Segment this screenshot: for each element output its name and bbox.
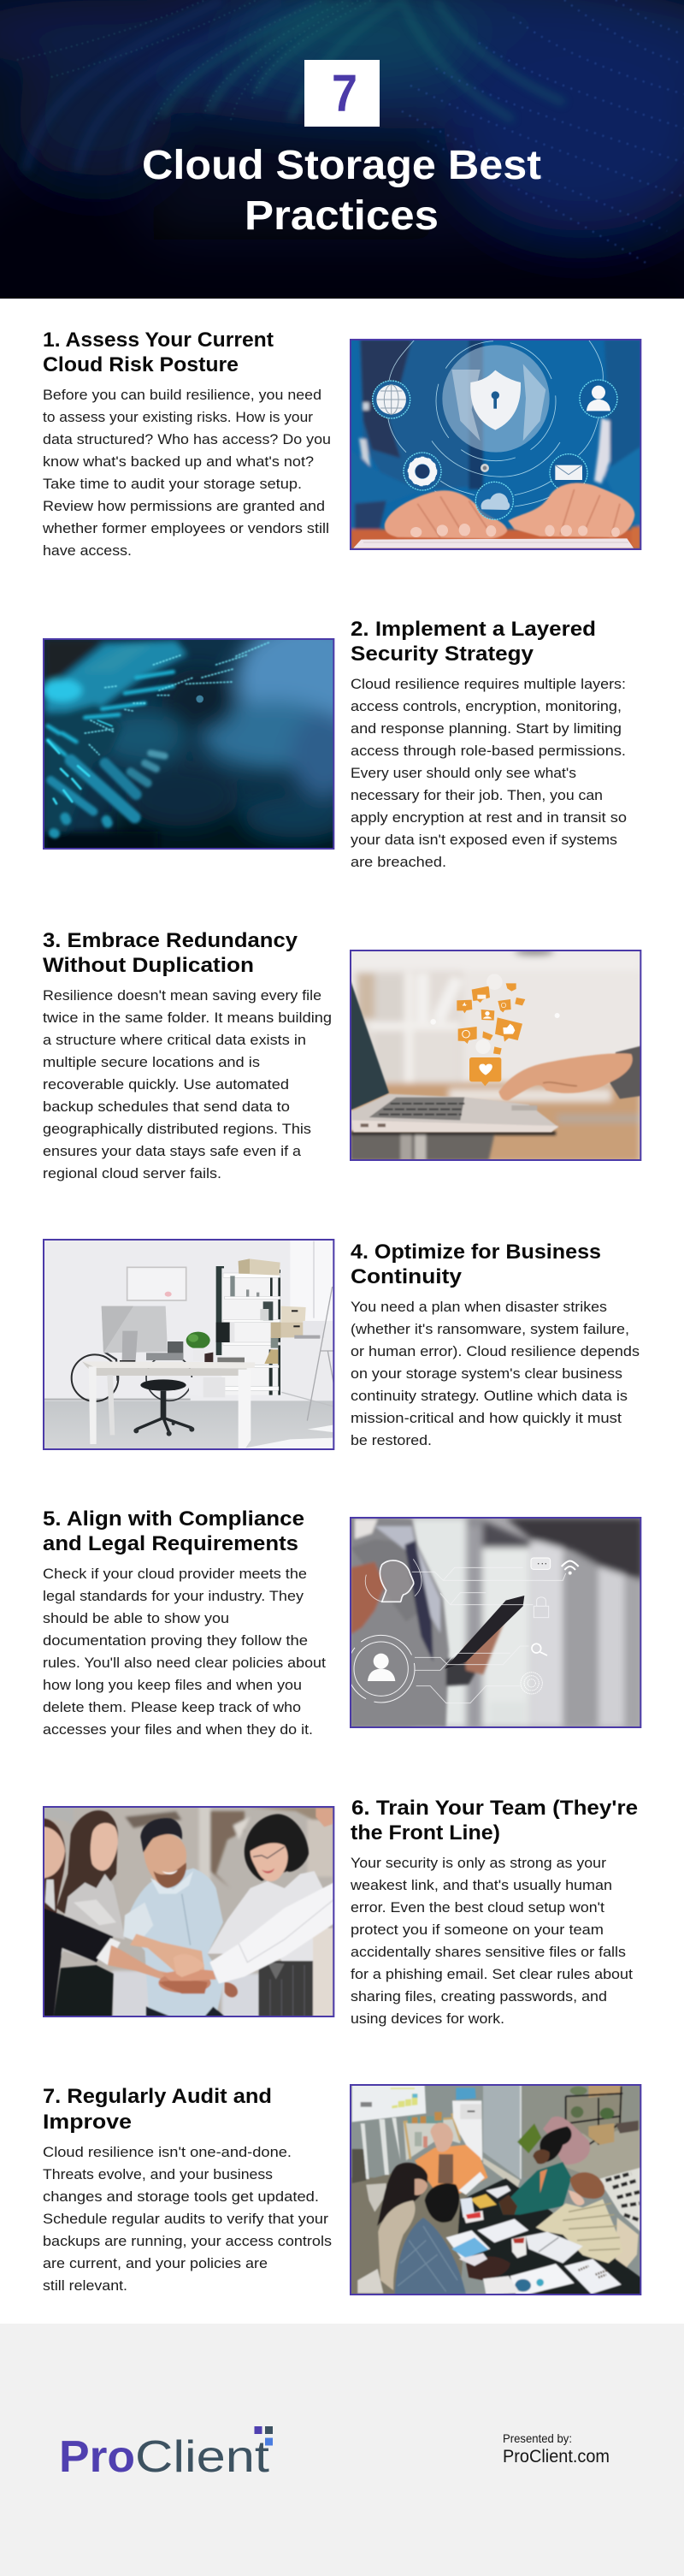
photo: laptop with social icons [351,948,640,1163]
body text: step 6: Your security is only as strong as your [351,1855,606,1871]
body text: step 3: Resilience doesn't mean saving every file [43,987,321,1004]
blonde woman [570,2172,604,2199]
body text: step 7: are current, and your policies are [43,2255,268,2271]
presented by credit: Presented by: [503,2431,572,2445]
icon: chat [531,1558,551,1569]
body text: step 5: how long you keep files and when you [43,1677,302,1693]
second woman [56,1810,118,1914]
logo: ProClient [59,2426,273,2482]
body text: step 1: to assess your existing risks. How is your [43,409,313,425]
icon: fingerprint [521,1673,542,1694]
body text: step 1: Take time to audit your storage setup. [43,476,302,492]
table [457,2178,640,2295]
desk [82,1361,255,1448]
heading: step 1: 1. Assess Your Current [43,329,274,352]
digital overlay lines [365,1559,566,1703]
body text: step 3: a structure where critical data exists in [43,1032,306,1048]
social media icons [457,983,525,1086]
title: Cloud Storage Best [142,143,541,188]
body text: step 2: apply encryption at rest and in transit so [351,809,627,826]
body text: step 7: backups are running, your access controls [43,2233,332,2249]
teal-jacket woman [540,2126,572,2162]
body text: step 2: Cloud resilience requires multiple layers: [351,676,626,692]
icon: user [347,1635,415,1703]
body text: step 1: data structured? Who has access? Do you [43,431,331,447]
photo: white office desk [44,1240,333,1449]
icon: globe [373,381,410,418]
body text: step 7 [43,2144,332,2294]
panel: step 7 [43,2085,640,2295]
body text: step 2: access controls, encryption, monitoring, [351,698,622,714]
photo: businessman with phone and digital icons [347,1518,643,1727]
wall frame [127,1267,186,1300]
heading: step 6: the Front Line) [351,1821,500,1845]
heading: step 4 [351,1241,601,1288]
body text: step 6: protect you if someone on your team [351,1922,604,1938]
icon: cloud [475,482,513,519]
title [142,143,541,239]
table reflection [351,1132,556,1160]
body text: step 4: or human error). Cloud resilience depends [351,1343,640,1359]
photo: team meeting around a table [351,2085,640,2295]
wooden shelf [404,2117,460,2160]
water dispenser [452,2100,482,2160]
foreground man [395,2218,466,2295]
stacked hands [158,1973,211,1993]
body text: step 1 [42,387,331,559]
papers and table items [470,2194,497,2208]
heading: step 2: Security Strategy [351,643,534,666]
body text: step 2: Every user should only see what's [351,765,576,781]
body text: step 5: documentation proving they follow the [43,1632,308,1649]
rug [598,2168,640,2232]
plant and desk items [146,1332,245,1364]
panel: step 4 [44,1240,640,1449]
plant [517,2123,541,2153]
blind [483,2085,521,2179]
icon: gear [404,453,441,490]
icon: lock [534,1597,549,1618]
man's forearm [130,1933,204,1978]
number badge [304,60,380,127]
body text: step 1: know what's backed up and what's not? [43,453,314,470]
photo: team joining hands [44,1807,333,2022]
monitor [102,1306,168,1363]
heading: step 5: and Legal Requirements [43,1532,298,1555]
heading: step 3: 3. Embrace Redundancy [43,929,298,952]
heading: step 1 [43,329,274,376]
orange-shirt man [415,2145,488,2194]
office chair [133,1379,194,1436]
heading: step 7 [43,2085,272,2134]
body text: step 5: delete them. Please keep track of who [43,1699,301,1715]
body text: step 3: backup schedules that send data to [43,1099,290,1115]
body text: step 3: ensures your data stays safe even if a [43,1143,302,1159]
easel [307,1287,333,1421]
panel: step 6 [44,1797,638,2027]
photo: hands typing with security icons [351,340,640,549]
body text: step 6: sharing files, creating passwords, and [351,1988,607,2005]
body text: step 5 [43,1566,326,1738]
shelves [216,1266,280,1395]
tv screen [352,2085,426,2122]
hands [385,483,634,539]
heading: step 7: 7. Regularly Audit and [43,2085,272,2108]
drawer unit [189,1377,193,1391]
woman with glasses [245,1814,309,1881]
icon: wifi [562,1560,579,1574]
body text: step 4: continuity strategy. Outline which data is [351,1388,628,1404]
heading: step 5 [43,1507,304,1555]
heading: step 3: Without Duplication [43,954,254,977]
laptop [351,980,558,1132]
header banner [0,0,684,299]
body text: step 7: Schedule regular audits to verify that your [43,2211,328,2227]
body text: step 7: Cloud resilience isn't one-and-done. [43,2144,292,2160]
body text: step 3: regional cloud server fails. [43,1165,221,1181]
presented by credit [503,2431,610,2466]
body text: step 2: are breached. [351,854,446,870]
heading: step 1: Cloud Risk Posture [43,353,239,376]
icon: head profile [380,1560,414,1602]
body text: step 2: access through role-based permissions. [351,743,626,759]
body text: step 3 [43,987,332,1181]
chairs [366,2183,386,2212]
body text: step 6: weakest link, and that's usually human [350,1877,612,1893]
logo: ProClient: Pro [59,2432,135,2482]
body text: step 4: on your storage system's clear business [351,1365,622,1382]
body text: step 1: whether former employees or vendors still [42,520,329,536]
body text: step 6: accidentally shares sensitive files or falls [351,1944,626,1960]
orbit rings [386,340,603,506]
title: Practices [245,193,439,239]
body text: step 1: Review how permissions are granted and [43,498,325,514]
body text: step 6 [350,1855,633,2027]
globe [442,345,550,453]
logo: ProClient: Client [135,2432,270,2482]
white sleeve arm [209,1882,333,1984]
body text: step 6: using devices for work. [351,2010,504,2027]
body text: step 6: for a phishing email. Set clear rules about [351,1966,633,1982]
panel: step 3 [43,929,640,1181]
shield [470,370,521,430]
background: digital data wave [0,0,684,299]
icon: magnifier [532,1643,547,1655]
body text: step 7: still relevant. [43,2277,127,2294]
body text: step 5: rules. You'll also need clear policies about [43,1655,326,1671]
ponytail woman [377,2163,428,2226]
boxes [239,1258,324,1339]
presented by credit: ProClient.com [503,2447,610,2466]
heading: step 7: Improve [43,2111,132,2134]
body text: step 5: accesses your files and when they do it. [43,1721,313,1738]
body text: step 4 [351,1299,640,1448]
body text: step 3: geographically distributed regions. This [43,1121,311,1137]
far-left woman [44,1818,66,1916]
body text: step 4: (whether it's ransomware, system failure, [351,1321,629,1337]
stands [361,2117,400,2179]
body text: step 7: changes and storage tools get updated. [43,2188,319,2205]
hand [498,1046,640,1100]
panel: step 5 [43,1507,643,1738]
footer [0,2324,684,2576]
photo: blue fibre data streams [43,638,335,850]
heading: step 4: Continuity [351,1265,462,1288]
body text: step 2: necessary for their job. Then, you can [351,787,603,803]
icon: user [580,380,617,417]
body text: step 1: Before you can build resilience, you need [43,387,321,403]
black shelf [566,2089,622,2145]
body text: step 4: mission-critical and how quickly it must [351,1410,622,1426]
icon: mail [550,454,587,492]
dark arm [44,1908,114,2016]
bicycle wheel [72,1354,118,1401]
heading: step 3 [43,929,298,977]
body text: step 5: legal standards for your industry. They [43,1588,304,1604]
panel: step 2 [42,618,627,870]
number badge: 7 [332,64,357,122]
heading: step 2 [351,618,596,666]
heading: step 6: 6. Train Your Team (They're [351,1797,638,1820]
body text: step 7: Threats evolve, and your business [43,2166,273,2182]
heading: step 4: 4. Optimize for Business [351,1241,601,1264]
body text: step 4: You need a plan when disaster strikes [351,1299,607,1315]
body text: step 4: be restored. [351,1432,432,1448]
beanbag [543,2117,590,2164]
chair back [168,1341,183,1359]
body text: step 5: should be able to show you [43,1610,229,1626]
body text: step 2: your data isn't exposed even if systems [351,832,617,848]
heading: step 5: 5. Align with Compliance [43,1507,304,1531]
body text: step 6: error. Even the best cloud setup won't [351,1899,604,1916]
keyboard [353,538,634,548]
panel: step 1 [42,329,640,559]
body text: step 2: and response planning. Start by limiting [351,720,622,737]
body text: step 2 [351,676,627,870]
body text: step 3: multiple secure locations and is [43,1054,260,1070]
heading: step 6 [351,1797,638,1845]
body text: step 1: have access. [43,542,132,559]
heading: step 2: 2. Implement a Layered [351,618,596,641]
man [125,1868,225,2016]
body text: step 3: recoverable quickly. Use automated [43,1076,289,1093]
body text: step 5: Check if your cloud provider meets the [43,1566,307,1582]
body text: step 3: twice in the same folder. It means building [43,1010,332,1026]
